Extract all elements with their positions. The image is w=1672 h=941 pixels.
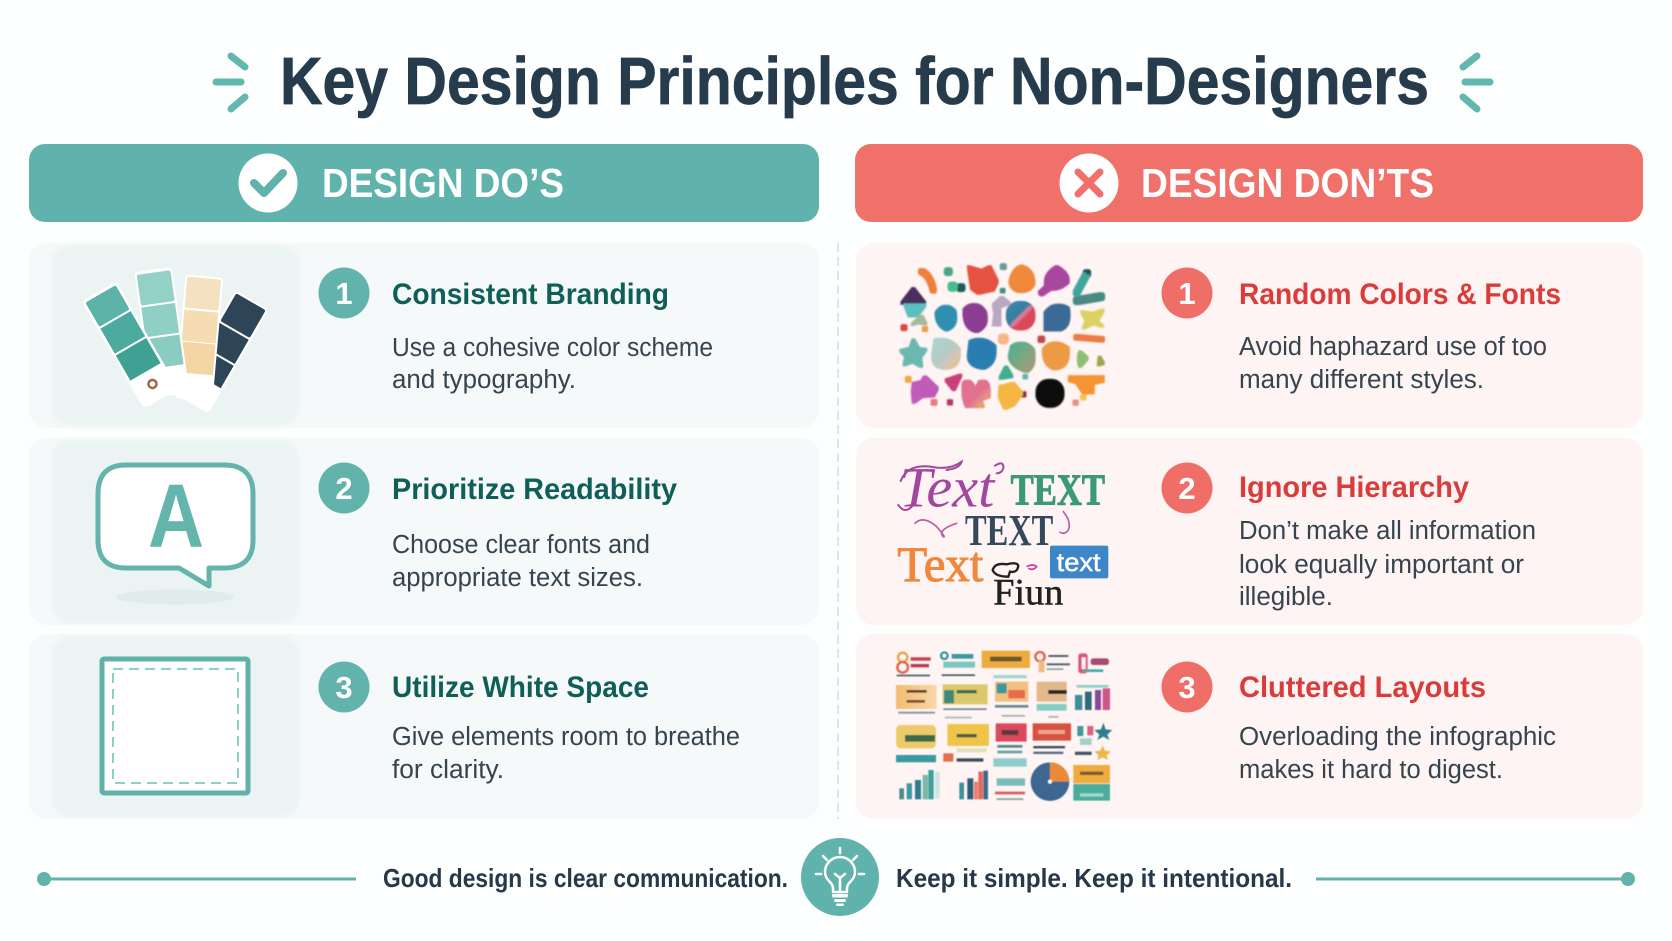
text: ignore hierarchy description: look equally important or — [1239, 551, 1525, 579]
text: prioritize readability description: Choose clear fonts and — [392, 531, 650, 559]
panel: consistent branding — [29, 243, 819, 428]
badge: number 3: 3 — [335, 670, 353, 705]
icon: speech bubble with letter A — [98, 465, 253, 604]
panel: design don'ts header — [855, 144, 1643, 222]
heading: prioritize readability: Prioritize Readability — [392, 473, 677, 506]
icon: mixed text styles: Text — [899, 458, 996, 520]
icon: cluttered mini layouts — [896, 651, 1112, 801]
heading text: Key Design Principles for Non-Designers — [280, 44, 1429, 119]
icon: mixed text styles: TEXT — [965, 506, 1053, 555]
text: consistent branding description: Use a cohesive color scheme — [392, 334, 713, 362]
heading: design do's: DESIGN DO’S — [322, 160, 564, 206]
icon: light bulb — [801, 838, 879, 916]
badge: number 1 — [1162, 268, 1212, 318]
text: cluttered layouts description — [1239, 723, 1556, 784]
panel: utilize white space — [29, 634, 819, 819]
heading: consistent branding: Consistent Branding — [392, 278, 669, 311]
panel: cluttered layouts — [856, 634, 1643, 819]
badge: number 1: 1 — [1178, 276, 1196, 311]
footer text: right: Keep it simple. Keep it intentional. — [896, 863, 1292, 893]
heading: cluttered layouts: Cluttered Layouts — [1239, 671, 1486, 704]
text: prioritize readability description — [392, 531, 650, 592]
badge: number 2 — [318, 462, 370, 514]
badge: number 3 — [318, 662, 370, 712]
text: random colors description: Avoid haphazard use of too — [1239, 333, 1547, 361]
heading: ignore hierarchy: Ignore Hierarchy — [1239, 471, 1469, 504]
icon: left title accent — [216, 56, 245, 109]
text: random colors description: many different styles. — [1239, 366, 1484, 394]
text: utilize white space description — [392, 723, 740, 784]
text: ignore hierarchy description: Don’t make all information — [1239, 517, 1536, 545]
icon: mixed text styles: Fiun — [993, 571, 1063, 612]
heading: random colors and fonts: Random Colors & Fonts — [1239, 278, 1561, 311]
icon: check mark — [238, 154, 298, 212]
icon: white space frame — [102, 659, 248, 793]
badge: number 1: 1 — [335, 276, 353, 311]
icon: random colour blobs — [901, 265, 1103, 408]
title — [216, 44, 1490, 119]
right footer rule with dot — [1316, 872, 1635, 886]
icon: mixed text styles: text — [1057, 547, 1101, 577]
text: ignore hierarchy description: illegible. — [1239, 583, 1333, 611]
text: cluttered layouts description: Overloading the infographic — [1239, 723, 1556, 751]
badge: number 3: 3 — [1178, 670, 1196, 705]
heading: utilize white space: Utilize White Space — [392, 671, 649, 704]
footer banner — [37, 838, 1635, 916]
text: random colors description — [1239, 333, 1547, 394]
text: utilize white space description: Give elements room to breathe — [392, 723, 740, 751]
left footer rule with dot — [37, 872, 356, 886]
icon: mixed text styles: Text — [897, 536, 983, 592]
icon: right title accent — [1463, 56, 1490, 109]
panel: design do's header — [29, 144, 819, 222]
text: consistent branding description — [392, 334, 713, 394]
panel: prioritize readability — [29, 438, 819, 625]
icon: mixed text styles: TEXT — [1011, 465, 1105, 514]
icon: cross mark — [1060, 154, 1118, 212]
badge: number 1 — [318, 268, 370, 318]
badge: number 2: 2 — [335, 471, 353, 506]
footer text: left: Good design is clear communication. — [383, 863, 788, 893]
badge: number 2: 2 — [1178, 471, 1196, 506]
text: ignore hierarchy description — [1239, 517, 1536, 611]
icon: mixed text styles — [897, 458, 1108, 612]
panel: random colors and fonts — [856, 243, 1643, 428]
panel: ignore hierarchy — [856, 438, 1643, 625]
badge: number 2 — [1162, 462, 1212, 514]
icon: colour swatch fan — [82, 267, 268, 413]
badge: number 3 — [1162, 662, 1212, 712]
icon: speech bubble with letter A: A — [148, 467, 204, 567]
heading: design don'ts: DESIGN DON’TS — [1141, 160, 1434, 206]
text: utilize white space description: for clarity. — [392, 756, 504, 784]
text: consistent branding description: and typography. — [392, 366, 576, 394]
text: cluttered layouts description: makes it hard to digest. — [1239, 756, 1503, 784]
text: prioritize readability description: appropriate text sizes. — [392, 564, 643, 592]
